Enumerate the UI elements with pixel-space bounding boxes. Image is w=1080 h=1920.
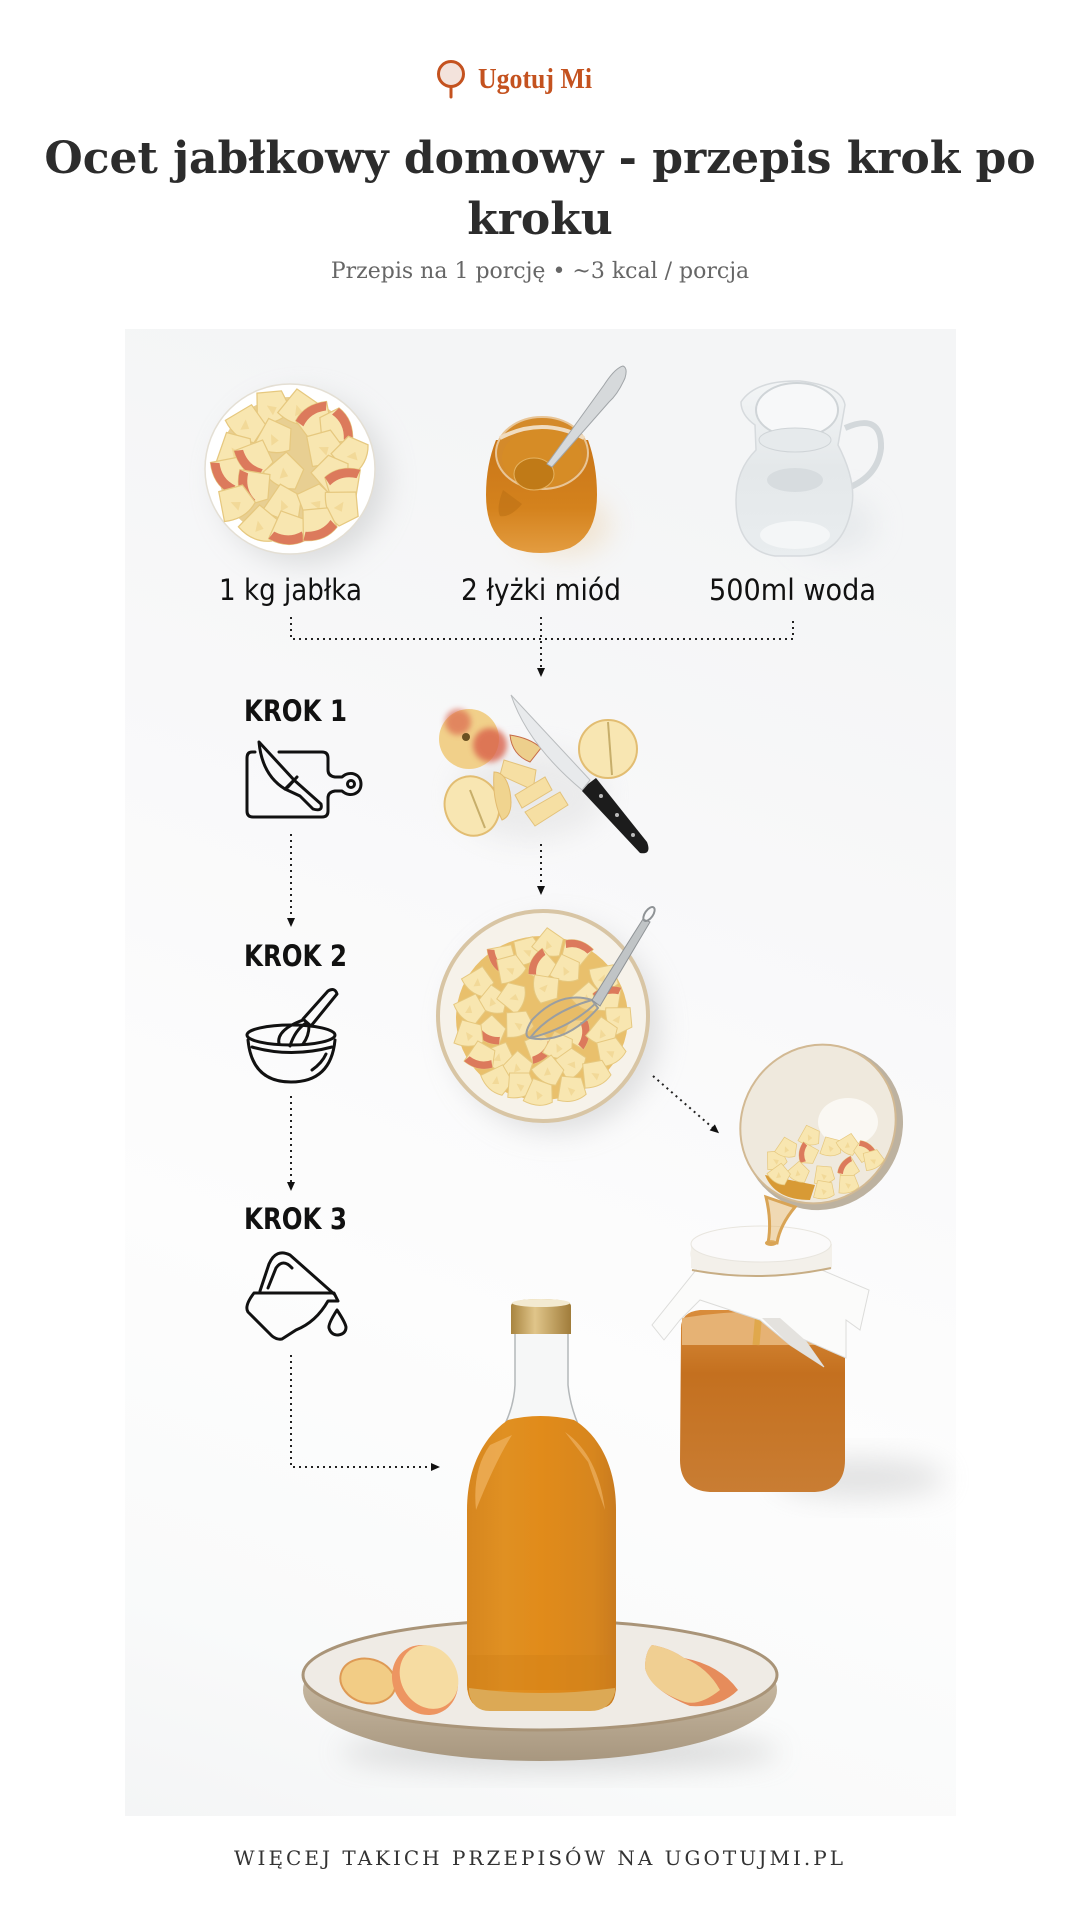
apple slices left bbox=[335, 1633, 471, 1727]
icon: logo spoon bbox=[438, 62, 464, 97]
footer: WIĘCEJ TAKICH PRZEPISÓW NA UGOTUJMI.PL bbox=[234, 1845, 846, 1870]
title: kroku bbox=[467, 194, 613, 245]
step 3 photo: jar with cloth bbox=[652, 1226, 945, 1498]
step 1 photo: cut apple and knife bbox=[436, 695, 648, 853]
pour stream bbox=[766, 1197, 795, 1243]
apple slice right bbox=[645, 1645, 738, 1706]
ingredient label: 2 łyżki miód bbox=[461, 573, 621, 607]
arrow: step 1 photo to step 2 photo bbox=[540, 844, 542, 887]
icon: pouring jug bbox=[247, 1253, 346, 1339]
step 3 photo: bowl pouring bbox=[709, 1014, 935, 1242]
ingredient: water pitcher bbox=[736, 381, 881, 556]
logo text: Ugotuj Mi bbox=[478, 63, 592, 95]
panel: recipe illustration bbox=[125, 329, 956, 1816]
step 2 photo: bowl with whisk bbox=[438, 905, 659, 1132]
icon: bowl and whisk bbox=[247, 990, 337, 1082]
arrow: step 2 photo to pour bbox=[653, 1076, 713, 1128]
step 2 heading: KROK 2 bbox=[244, 939, 347, 973]
logo bbox=[438, 62, 592, 97]
ingredient: honey jar with spoon bbox=[486, 366, 626, 555]
bottle bbox=[467, 1299, 616, 1711]
ingredient label: 1 kg jabłka bbox=[219, 573, 362, 607]
arrow: step 1 down left bbox=[290, 834, 292, 919]
title: Ocet jabłkowy domowy - przepis krok po bbox=[44, 133, 1036, 184]
ingredient: apples in bowl bbox=[205, 384, 387, 564]
arrow: step 2 down left bbox=[290, 1096, 292, 1183]
ingredient label: 500ml woda bbox=[709, 573, 876, 607]
step 3 heading: KROK 3 bbox=[244, 1202, 347, 1236]
icon: cutting board and knife bbox=[247, 742, 361, 817]
arrow: step 3 to bottle bbox=[291, 1355, 432, 1467]
arrow: ingredients to step 1 bbox=[291, 617, 793, 669]
final photo: plate with bottle and apples bbox=[303, 1299, 780, 1770]
subtitle: Przepis na 1 porcję • ~3 kcal / porcja bbox=[331, 259, 749, 284]
step 1 heading: KROK 1 bbox=[244, 694, 347, 728]
